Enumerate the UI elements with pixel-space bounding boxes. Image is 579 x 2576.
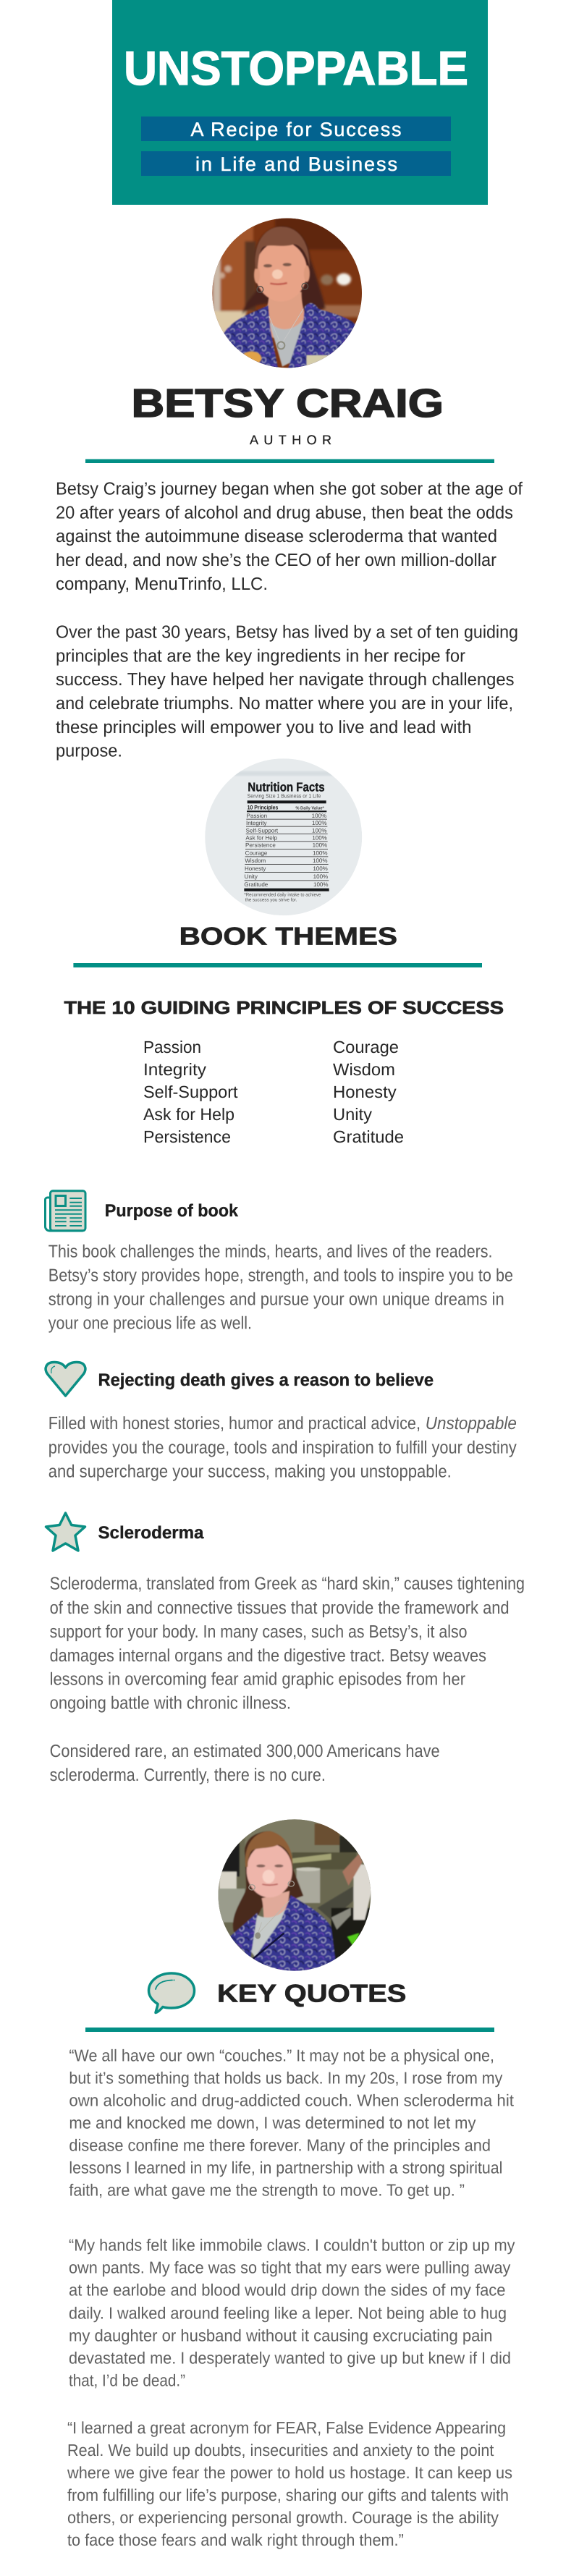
text: scleroderma: Scleroderma, translated from Greek as “hard skin,” causes tightening <box>50 1575 525 1594</box>
quote two: daily. I walked around feeling like a leper. Not being able to hug <box>69 2303 507 2322</box>
icon: newspaper <box>45 1191 85 1231</box>
heading: book themes: BOOK THEMES <box>179 923 397 951</box>
quote one: own alcoholic and drug-addicted couch. When scleroderma hit <box>69 2090 515 2109</box>
quote three: Real. We build up doubts, insecurities and anxiety to the point <box>67 2441 494 2460</box>
text: rejecting death: and supercharge your success, making you unstoppable. <box>48 1462 452 1481</box>
nutrition facts table: Wisdom <box>245 857 266 864</box>
nutrition facts table: 100% <box>313 850 327 856</box>
quote one: faith, are what gave me the strength to move. To get up. ” <box>69 2180 465 2199</box>
text: scleroderma: ongoing battle with chronic illness. <box>50 1694 291 1713</box>
list: principles column one <box>143 1038 238 1146</box>
nutrition facts table <box>244 780 329 902</box>
quote three: “I learned a great acronym for FEAR, False Evidence Appearing <box>67 2418 506 2437</box>
text: scleroderma: lessons in overcoming fear amid graphic episodes from her <box>50 1670 465 1690</box>
nutrition facts table: % Daily Value* <box>295 805 324 810</box>
nutrition facts table: Unity <box>245 873 258 880</box>
list: principles column one: Persistence <box>143 1127 231 1146</box>
nutrition facts table: 100% <box>313 857 327 864</box>
nutrition facts table: 100% <box>313 881 328 888</box>
list: principles column one: Ask for Help <box>143 1105 234 1124</box>
quote two: my daughter or husband without it causing excruciating pain <box>69 2326 492 2344</box>
nutrition facts table: 100% <box>313 865 328 872</box>
list: principles column two: Gratitude <box>333 1127 404 1146</box>
text: scleroderma <box>50 1575 525 1785</box>
text: scleroderma: damages internal organs and the digestive tract. Betsy weaves <box>50 1646 486 1666</box>
nutrition facts table: the success you strive for. <box>245 897 297 902</box>
quote two: “My hands felt like immobile claws. I couldn't button or zip up my <box>69 2235 515 2254</box>
list: principles column two: Unity <box>333 1105 372 1124</box>
author biography: principles that are the key ingredients in her recipe for <box>56 646 465 666</box>
text: purpose of book: your one precious life as well. <box>48 1313 252 1333</box>
kitchen portrait photo <box>217 1818 373 1973</box>
nutrition facts table: 100% <box>312 813 326 819</box>
quote three: others, or experiencing personal growth. Courage is the ability <box>67 2508 499 2527</box>
quote three <box>67 2418 512 2549</box>
list: principles column two: Wisdom <box>333 1060 395 1079</box>
nutrition facts table: Honesty <box>245 865 266 872</box>
text: rejecting death: Unstoppable <box>426 1414 517 1433</box>
icon: heart <box>46 1362 85 1396</box>
text: rejecting death: Filled with honest stories, humor and practical advice, <box>48 1414 420 1433</box>
author biography: Betsy Craig’s journey began when she got sober at the age of <box>56 479 523 499</box>
icon: star <box>46 1513 85 1551</box>
nutrition facts table: Self-Support <box>246 827 278 834</box>
heading: ten guiding principles: THE 10 GUIDING PRINCIPLES OF SUCCESS <box>64 998 504 1018</box>
text: rejecting death <box>48 1414 517 1481</box>
list: principles column two: Honesty <box>333 1082 397 1101</box>
heading: scleroderma: Scleroderma <box>98 1523 204 1543</box>
nutrition facts table: Nutrition Facts <box>248 780 325 794</box>
quote two: own pants. My face was so tight that my ears were pulling away <box>69 2258 511 2276</box>
nutrition facts table: Ask for Help <box>245 834 277 841</box>
author role label: AUTHOR <box>250 433 331 447</box>
list: principles column one: Self-Support <box>143 1082 238 1101</box>
nutrition facts table: Serving Size 1 Business or 1 Life <box>248 793 321 799</box>
quote three: from fulfilling our life’s purpose, sharing our gifts and talents with <box>67 2486 509 2504</box>
quote one: “We all have our own “couches.” It may not be a physical one, <box>69 2046 494 2064</box>
list: principles column two: Courage <box>333 1038 399 1056</box>
text: rejecting death: provides you the courage, tools and inspiration to fulfill your destiny <box>48 1438 517 1457</box>
heading: key quotes: KEY QUOTES <box>217 1980 407 2008</box>
text: purpose of book: This book challenges the minds, hearts, and lives of the readers. <box>48 1242 493 1261</box>
text: purpose of book: strong in your challenges and pursue your own unique dreams in <box>48 1289 504 1309</box>
text: scleroderma: Considered rare, an estimated 300,000 Americans have <box>50 1742 440 1761</box>
quote one: disease confine me there forever. Many of the principles and <box>69 2135 491 2154</box>
heading: rejecting death: Rejecting death gives a reason to believe <box>98 1370 434 1390</box>
nutrition facts table: 10 Principles <box>248 804 278 810</box>
author biography: Over the past 30 years, Betsy has lived by a set of ten guiding <box>56 622 518 642</box>
nutrition facts table: 100% <box>313 873 328 880</box>
quote three: where we give fear the power to hold us hostage. It can keep us <box>67 2463 512 2482</box>
list: principles column one: Passion <box>143 1038 201 1056</box>
quote one: lessons I learned in my life, in partnership with a strong spiritual <box>69 2158 502 2177</box>
nutrition facts label image <box>205 758 362 915</box>
nutrition facts table: Courage <box>245 850 267 856</box>
heading: purpose of book: Purpose of book <box>105 1201 239 1221</box>
quote one <box>69 2046 515 2199</box>
text: scleroderma: of the skin and connective tissues that provide the framework and <box>50 1598 510 1618</box>
nutrition facts table: 100% <box>312 820 326 826</box>
author biography: these principles will empower you to live and lead with <box>56 718 472 737</box>
author biography: and celebrate triumphs. No matter where you are in your life, <box>56 694 513 713</box>
icon: speech bubble <box>149 1973 194 2013</box>
title: UNSTOPPABLE: UNSTOPPABLE <box>124 41 468 95</box>
quote two: that, I’d be dead.” <box>69 2370 185 2389</box>
nutrition facts table: Passion <box>247 813 267 819</box>
subtitle bar: A Recipe for Success <box>141 116 451 141</box>
nutrition facts table: Integrity <box>246 820 266 826</box>
text: scleroderma: support for your body. In many cases, such as Betsy’s, it also <box>50 1622 468 1642</box>
title banner: book cover <box>112 0 488 205</box>
quote one: me and knocked me down, I was determined to not let my <box>69 2113 476 2132</box>
author biography: her dead, and now she’s the CEO of her own million-dollar <box>56 551 496 570</box>
subtitle bar: in Life and Business: in Life and Business <box>195 153 397 175</box>
quote three: to face those fears and walk right through them.” <box>67 2530 404 2549</box>
nutrition facts table: Persistence <box>245 842 276 849</box>
author name: BETSY CRAIG <box>132 381 444 425</box>
nutrition facts table: Gratitude <box>244 881 268 888</box>
text: scleroderma: scleroderma. Currently, there is no cure. <box>50 1766 326 1785</box>
text: purpose of book: Betsy’s story provides hope, strength, and tools to inspire you to be <box>48 1266 513 1285</box>
list: principles column one: Integrity <box>143 1060 206 1079</box>
quote two: at the earlobe and blood would drip down the sides of my face <box>69 2280 505 2299</box>
list: principles column two <box>333 1038 404 1146</box>
author biography <box>56 479 523 761</box>
author portrait photo <box>210 216 364 371</box>
quote two: devastated me. I desperately wanted to give up but knew if I did <box>69 2348 511 2367</box>
subtitle bar: A Recipe for Success: A Recipe for Success <box>191 119 401 140</box>
author biography: success. They have helped her navigate through challenges <box>56 670 514 690</box>
author biography: company, MenuTrinfo, LLC. <box>56 575 268 594</box>
nutrition facts table: 100% <box>312 827 326 834</box>
subtitle bar: in Life and Business <box>141 151 451 176</box>
author biography: against the autoimmune disease scleroderma that wanted <box>56 527 497 546</box>
quote two <box>69 2235 515 2389</box>
nutrition facts table: 100% <box>312 834 327 841</box>
nutrition facts table: 100% <box>313 842 327 849</box>
nutrition facts table: *Recommended daily intake to achieve <box>244 892 321 897</box>
author biography: purpose. <box>56 742 122 761</box>
quote one: but it’s something that holds us back. In my 20s, I rose from my <box>69 2068 503 2087</box>
author biography: 20 after years of alcohol and drug abuse, then beat the odds <box>56 503 513 522</box>
text: purpose of book <box>48 1242 513 1333</box>
